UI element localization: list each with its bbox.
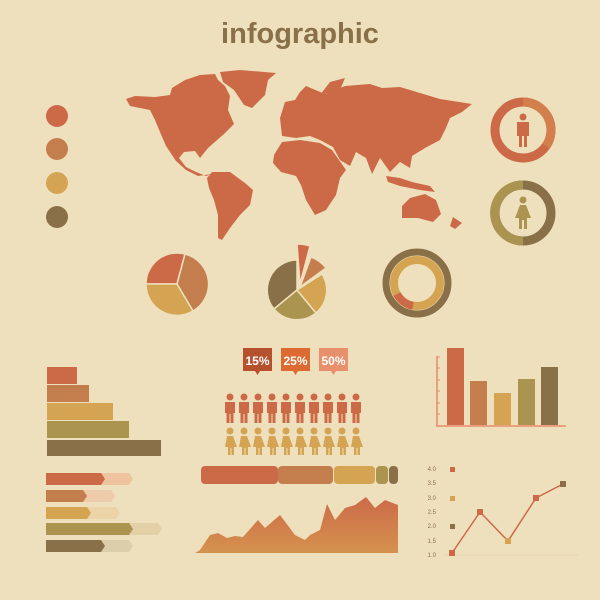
gender ring: male: [495, 102, 551, 158]
donut chart: [386, 252, 448, 314]
line chart: 1.0: [428, 553, 437, 559]
title: infographic: [221, 18, 379, 50]
gender ring: female: [495, 185, 551, 241]
line chart: 2.5: [428, 510, 437, 516]
line chart: 4.0: [428, 467, 437, 473]
segmented bar: [201, 466, 398, 484]
line chart: 3.0: [428, 496, 437, 502]
line chart: 2.0: [428, 524, 437, 530]
callout 25%: 25%: [283, 354, 308, 368]
people icons: men: [225, 394, 361, 423]
area chart: [195, 497, 398, 553]
callout 15%: [243, 348, 272, 375]
horizontal bar chart: [47, 367, 161, 456]
pie chart 1: [146, 253, 209, 315]
line chart: [428, 467, 578, 559]
callout 25%: [281, 348, 310, 375]
callout 15%: 15%: [245, 354, 270, 368]
arrow bars: [46, 473, 162, 552]
callout 50%: 50%: [321, 354, 346, 368]
callout 50%: [319, 348, 348, 375]
line chart: 3.5: [428, 481, 437, 487]
legend circles: [46, 105, 68, 228]
people icons: women: [225, 428, 363, 455]
world map: [126, 70, 472, 240]
pie chart 2: [267, 244, 327, 320]
vertical bar chart: [436, 348, 566, 426]
line chart: 1.5: [428, 539, 437, 545]
